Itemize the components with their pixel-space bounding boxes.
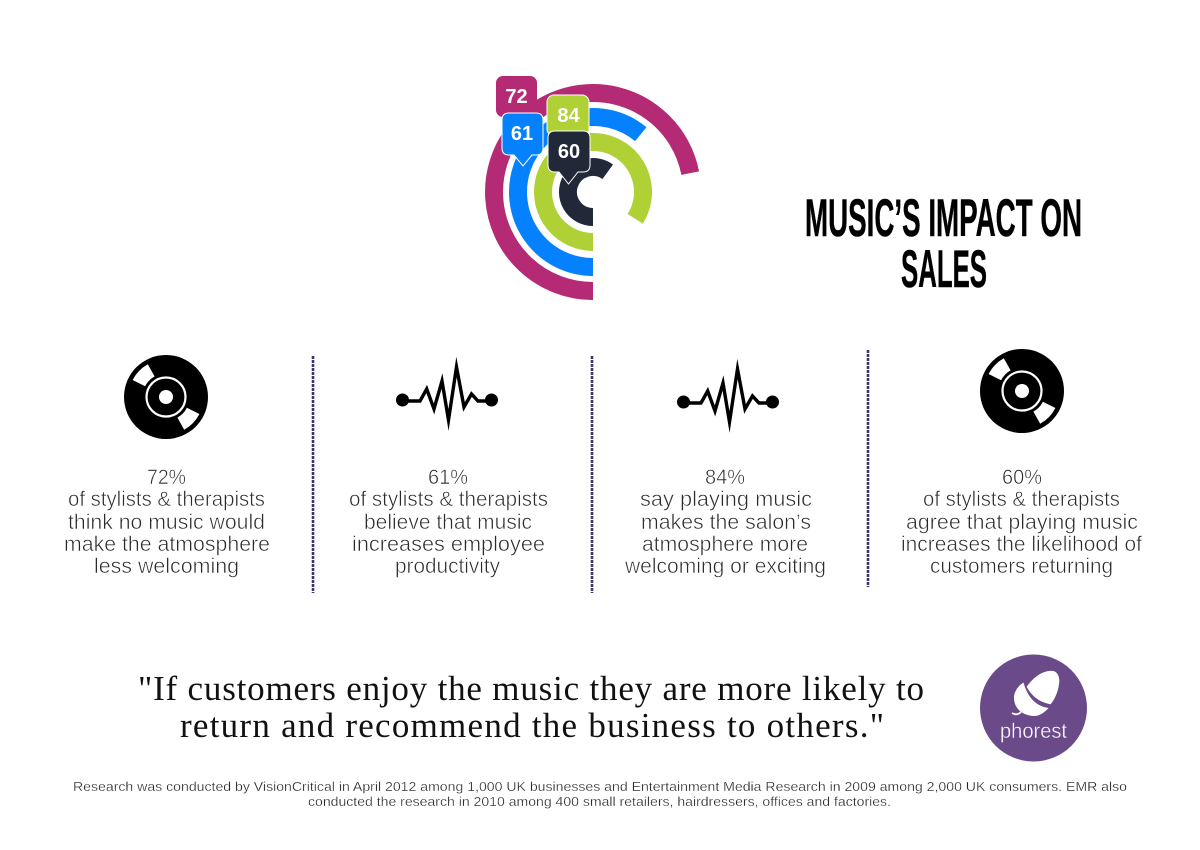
arc: 72 percent	[494, 93, 690, 291]
quote: "If customers enjoy the music they are more likely to	[138, 669, 924, 708]
marker: 72: 72	[505, 86, 528, 108]
footnote: conducted the research in 2010 among 400 small retailers, hairdressers, offices and factories.	[308, 794, 891, 809]
stat text: 84 percent	[624, 465, 826, 578]
stat text: 84 percent: 84%	[705, 465, 745, 489]
stat text: 72 percent: 72%	[147, 465, 186, 489]
stat text: 60 percent: of stylists & therapists	[923, 487, 1120, 511]
stat text: 72 percent: make the atmosphere	[64, 532, 270, 556]
stat text: 72 percent: of stylists & therapists	[68, 487, 265, 511]
stat text: 72 percent: less welcoming	[94, 554, 239, 578]
marker: 84	[547, 95, 589, 136]
stat text: 72 percent: think no music would	[68, 510, 265, 534]
stat text: 60 percent: customers returning	[930, 554, 1113, 578]
quote	[138, 669, 924, 745]
stat text: 61 percent: believe that music	[364, 510, 532, 534]
radial chart	[494, 76, 690, 291]
title: SALES	[901, 240, 987, 299]
logo: phorest: phorest	[1000, 720, 1067, 743]
title	[805, 189, 1082, 299]
stat text: 61 percent	[349, 465, 548, 578]
marker: 60: 60	[558, 141, 580, 163]
stat text: 60 percent	[901, 465, 1142, 578]
stat text: 60 percent: increases the likelihood of	[901, 532, 1142, 556]
stat text: 61 percent: 61%	[428, 465, 468, 489]
quote: return and recommend the business to others."	[180, 706, 884, 745]
footnote	[73, 779, 1127, 809]
stat text: 84 percent: welcoming or exciting	[624, 554, 826, 578]
logo: phorest	[980, 654, 1087, 762]
stat text: 60 percent: agree that playing music	[906, 510, 1138, 534]
stat text: 84 percent: atmosphere more	[642, 532, 808, 556]
footnote: Research was conducted by VisionCritical in April 2012 among 1,000 UK businesses and Entertainment Media Research in 2009 among 2,000 UK consumers. EMR also	[73, 779, 1127, 794]
stat text: 61 percent: increases employee	[352, 532, 545, 556]
icon: vinyl record 2	[980, 349, 1064, 433]
stat text: 84 percent: makes the salon’s	[641, 510, 811, 534]
arc: 84 percent	[543, 142, 643, 242]
marker: 61	[502, 113, 543, 166]
arc: 61 percent	[518, 117, 641, 267]
stat text: 61 percent: productivity	[395, 554, 500, 578]
marker: 60	[548, 131, 590, 184]
icon: sound wave 1	[396, 367, 498, 420]
divider lines	[313, 350, 868, 593]
stat text: 72 percent	[64, 465, 270, 578]
stat text: 84 percent: say playing music	[640, 487, 812, 511]
marker: 84: 84	[557, 105, 580, 127]
arc: 60 percent	[568, 167, 608, 217]
stat text: 61 percent: of stylists & therapists	[349, 487, 548, 511]
marker: 72	[496, 76, 537, 117]
marker: 61: 61	[511, 123, 533, 145]
icon: vinyl record 1	[124, 355, 208, 439]
stat text: 60 percent: 60%	[1002, 465, 1042, 489]
icon: sound wave 2	[677, 369, 779, 422]
